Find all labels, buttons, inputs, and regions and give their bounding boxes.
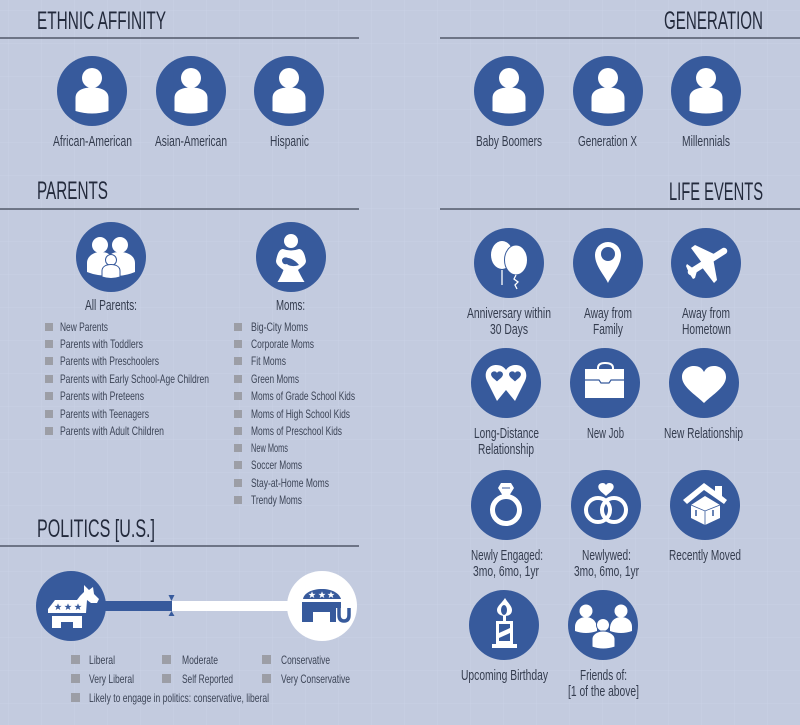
list: moms: Soccer Moms: [251, 458, 302, 472]
icon: house and box: [670, 470, 740, 540]
list: moms: Fit Moms: [251, 354, 286, 368]
slider bar: [100, 595, 302, 616]
label: Away from Family: Family: [593, 322, 624, 338]
legend: political categories: Likely to engage in politics: conservative, liberal: [89, 691, 269, 705]
icon: briefcase: [570, 348, 640, 418]
list: moms: Green Moms: [251, 372, 299, 386]
legend: political categories: Liberal: [89, 653, 115, 667]
label: Upcoming Birthday: Upcoming Birthday: [461, 668, 549, 684]
label: Newlywed: 3mo, 6mo, 1yr: [574, 564, 639, 580]
list: moms: Stay-at-Home Moms: [251, 476, 329, 490]
icon: birthday candle: [469, 590, 539, 660]
legend: political categories: Very Conservative: [281, 672, 350, 686]
label: Friends of: [1 of the above]: [568, 684, 639, 700]
list: moms: Moms of Grade School Kids: [251, 389, 355, 403]
list: all parents: Parents with Adult Children: [60, 424, 164, 438]
label: Newly Engaged: Newly Engaged:: [471, 548, 543, 564]
list: all parents: Parents with Toddlers: [60, 337, 143, 351]
label: Hispanic: Hispanic: [270, 134, 309, 150]
label: New Relationship: New Relationship: [664, 426, 743, 442]
panel: life events: [440, 178, 800, 700]
label: New Job: New Job: [587, 426, 624, 442]
label: Anniversary within 30 Days: Anniversary within: [467, 306, 551, 322]
icon: friends group: [568, 590, 638, 660]
icon: family: [76, 222, 146, 292]
label: All Parents: All Parents:: [85, 298, 137, 314]
panel: politics: [0, 515, 359, 705]
legend: political categories: Very Liberal: [89, 672, 134, 686]
label: African-American: African-American: [53, 134, 132, 150]
label: Away from Family: Away from: [584, 306, 632, 322]
list: all parents: [45, 320, 209, 438]
label: Long-Distance Relationship: Long-Distance: [474, 426, 539, 442]
icon: heart: [669, 348, 739, 418]
label: Millennials: Millennials: [682, 134, 730, 150]
label: Anniversary within 30 Days: 30 Days: [490, 322, 528, 338]
legend: political categories: Self Reported: [182, 672, 233, 686]
label: Newly Engaged: 3mo, 6mo, 1yr: [473, 564, 539, 580]
list: moms: Moms of Preschool Kids: [251, 424, 342, 438]
icon: two heart pins: [471, 348, 541, 418]
icon: wedding rings: [571, 470, 641, 540]
icon: Millennials person: [671, 56, 741, 126]
list: all parents: Parents with Preschoolers: [60, 354, 159, 368]
list: all parents: Parents with Teenagers: [60, 407, 149, 421]
heading: politics: POLITICS [U.S.]: [37, 515, 155, 543]
icon: map pin: [573, 228, 643, 298]
heading: parents: PARENTS: [37, 177, 108, 205]
icon: Asian-American person: [156, 56, 226, 126]
icon: Generation X person: [573, 56, 643, 126]
heading: ethnic affinity: ETHNIC AFFINITY: [37, 7, 166, 35]
label: Long-Distance Relationship: Relationship: [478, 442, 534, 458]
label: Newlywed: Newlywed:: [582, 548, 631, 564]
icon: elephant: [287, 571, 357, 641]
list: all parents: New Parents: [60, 320, 108, 334]
icon: African-American person: [57, 56, 127, 126]
list: moms: Moms of High School Kids: [251, 407, 350, 421]
panel: generation: [440, 7, 800, 150]
list: moms: [234, 320, 355, 507]
label: Baby Boomers: Baby Boomers: [476, 134, 542, 150]
legend: political categories: Conservative: [281, 653, 330, 667]
list: all parents: Parents with Preteens: [60, 389, 144, 403]
icon: Baby Boomers person: [474, 56, 544, 126]
legend: political categories: Moderate: [182, 653, 218, 667]
panel: ethnic affinity: [0, 7, 359, 150]
icon: donkey: [36, 571, 106, 641]
icon: engagement ring: [471, 470, 541, 540]
label: Friends of: Friends of:: [580, 668, 627, 684]
label: Moms: Moms:: [276, 298, 305, 314]
label: Away from Hometown: Hometown: [682, 322, 731, 338]
panel: parents: [0, 177, 359, 507]
label: Asian-American: Asian-American: [155, 134, 227, 150]
icon: airplane: [671, 228, 741, 298]
label: Generation X: Generation X: [578, 134, 637, 150]
icon: balloons: [474, 228, 544, 298]
list: moms: Trendy Moms: [251, 493, 302, 507]
icon: Hispanic person: [254, 56, 324, 126]
list: all parents: Parents with Early School-Age Children: [60, 372, 209, 386]
list: moms: Corporate Moms: [251, 337, 314, 351]
legend: political categories: [71, 653, 350, 705]
list: moms: Big-City Moms: [251, 320, 308, 334]
label: Away from Hometown: Away from: [682, 306, 730, 322]
icon: mother and baby: [256, 222, 326, 292]
label: Recently Moved: Recently Moved: [669, 548, 741, 564]
list: moms: New Moms: [251, 441, 288, 455]
